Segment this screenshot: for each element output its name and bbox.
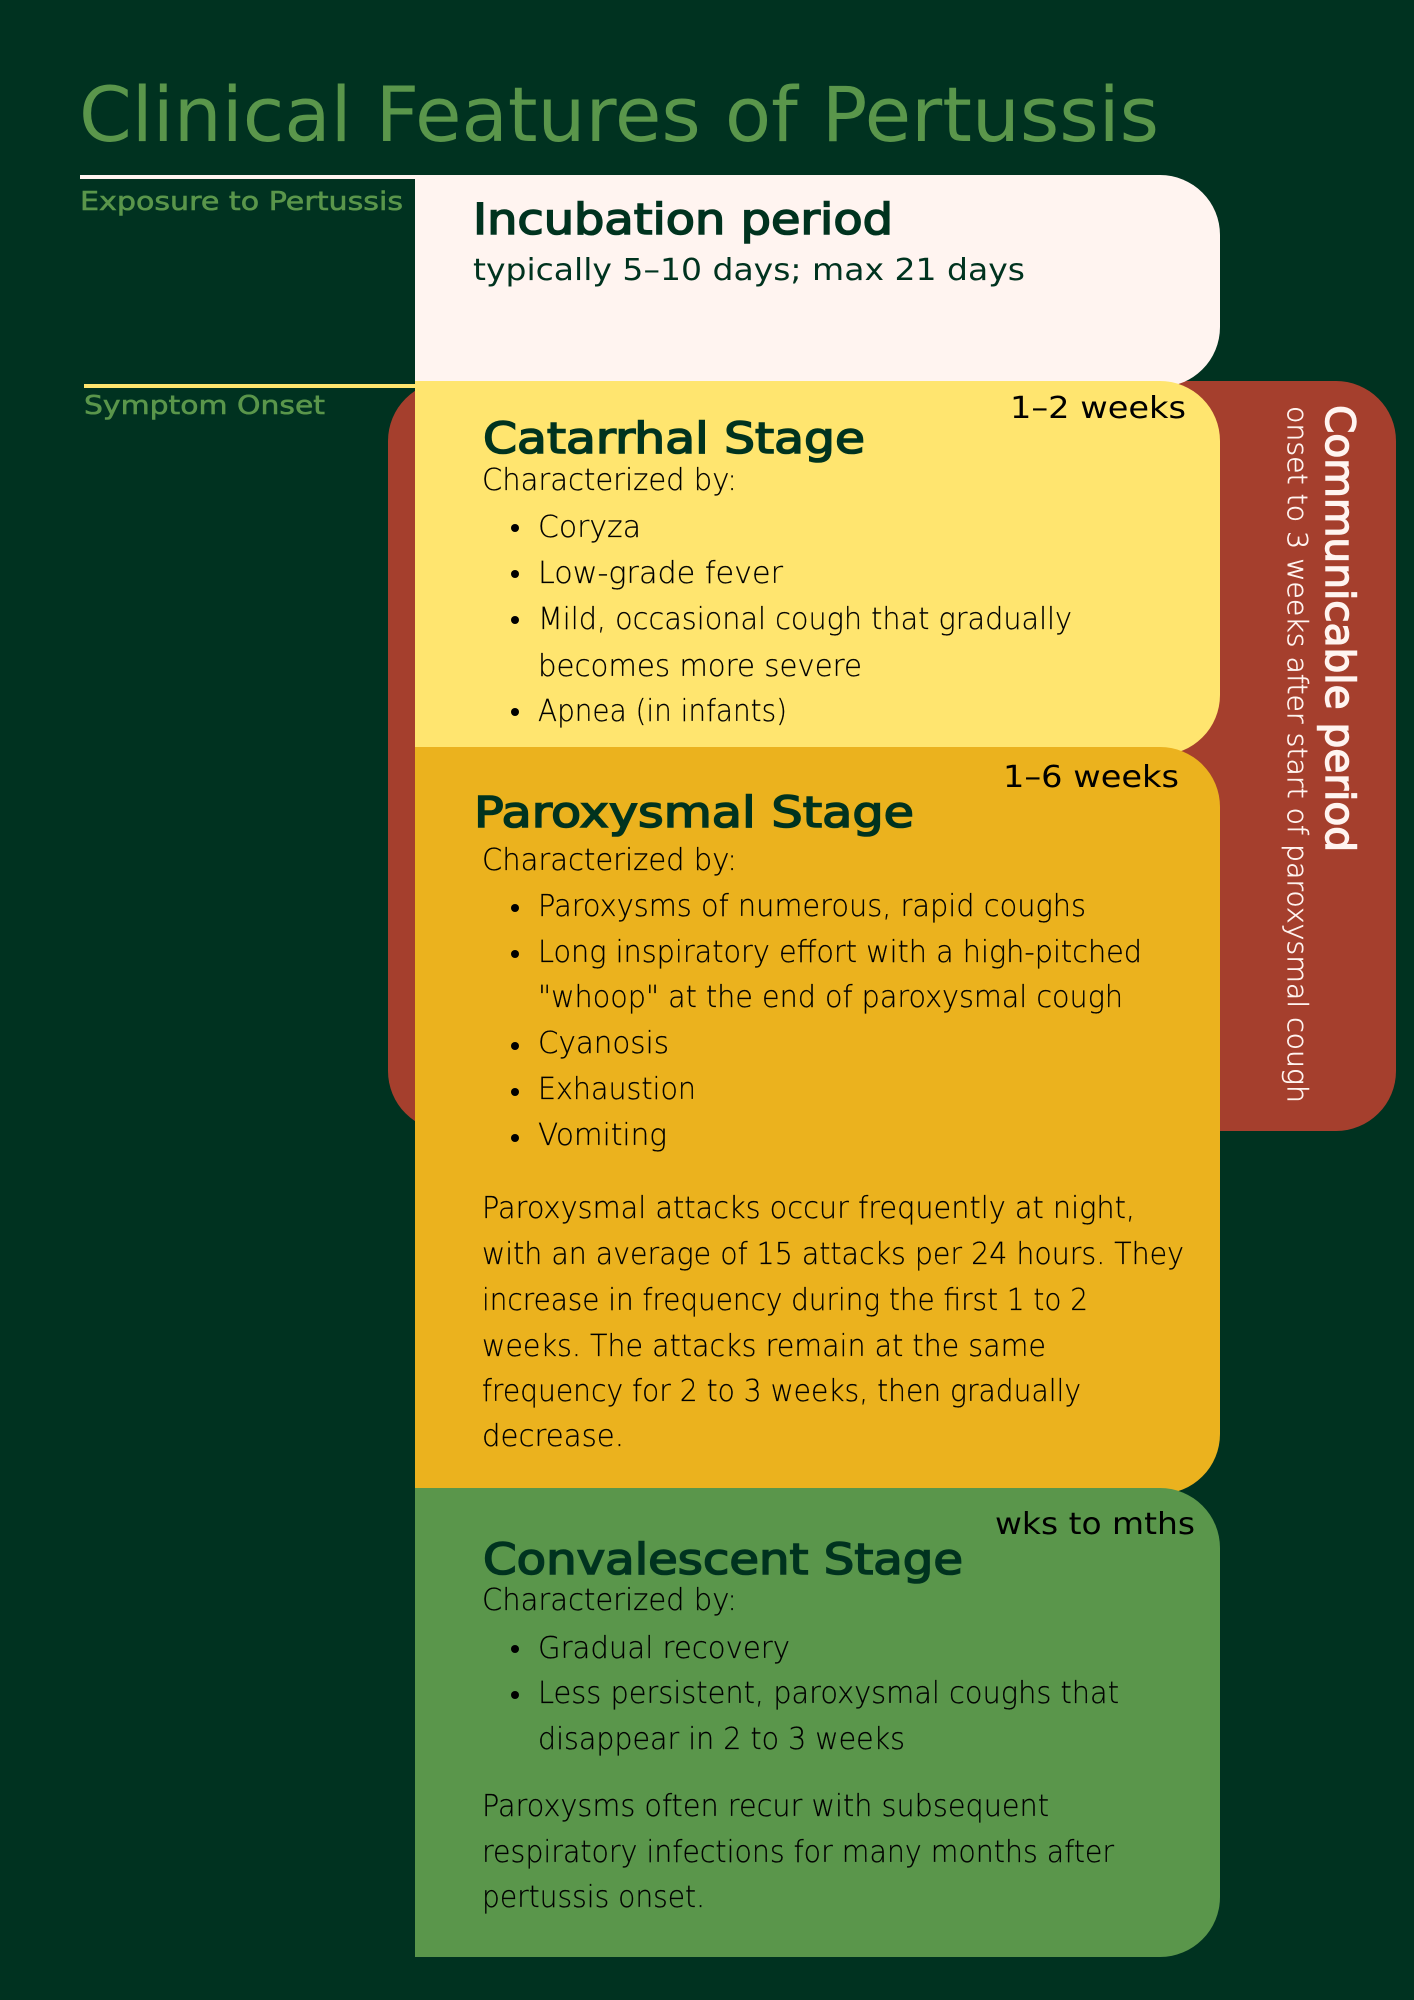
paroxysmal paragraph: with an average of 15 attacks per 24 hours. They bbox=[482, 1237, 1184, 1272]
convalescent paragraph: Paroxysms often recur with subsequent bbox=[482, 1789, 1049, 1824]
convalescent symptom list: Less persistent, paroxysmal coughs that bbox=[538, 1676, 1119, 1711]
paroxysmal duration: 1–6 weeks bbox=[1003, 760, 1179, 795]
catarrhal heading: Catarrhal Stage bbox=[483, 414, 865, 464]
paroxysmal paragraph: decrease. bbox=[482, 1419, 624, 1454]
convalescent symptom list: Gradual recovery bbox=[538, 1631, 790, 1666]
paroxysmal symptom list: Long inspiratory effort with a high-pitched bbox=[538, 935, 1142, 970]
communicable period text: onset to 3 weeks after start of paroxysmal cough bbox=[1281, 406, 1314, 1103]
incubation heading: Incubation period bbox=[473, 195, 893, 245]
catarrhal symptom list bbox=[511, 510, 1072, 729]
paroxysmal symptom list bbox=[511, 889, 1142, 1153]
paroxysmal paragraph bbox=[482, 1191, 1184, 1454]
paroxysmal symptom list: Cyanosis bbox=[538, 1026, 669, 1061]
convalescent intro: Characterized by: bbox=[482, 1583, 737, 1618]
panel: communicable period bbox=[388, 381, 1396, 1131]
marker: symptom onset bbox=[84, 384, 415, 421]
convalescent symptom list: disappear in 2 to 3 weeks bbox=[538, 1722, 905, 1757]
paroxysmal symptom list: "whoop" at the end of paroxysmal cough bbox=[538, 980, 1123, 1015]
paroxysmal heading: Paroxysmal Stage bbox=[474, 788, 914, 838]
marker: exposure to pertussis: Exposure to Pertussis bbox=[80, 187, 403, 217]
catarrhal symptom list: becomes more severe bbox=[538, 649, 862, 684]
convalescent paragraph: pertussis onset. bbox=[482, 1880, 705, 1915]
marker: symptom onset: Symptom Onset bbox=[84, 391, 325, 421]
catarrhal symptom list: Coryza bbox=[538, 510, 641, 545]
panel: catarrhal stage bbox=[415, 381, 1220, 755]
convalescent duration: wks to mths bbox=[995, 1507, 1195, 1542]
convalescent heading: Convalescent Stage bbox=[483, 1535, 963, 1585]
paroxysmal paragraph: increase in frequency during the first 1 to 2 bbox=[482, 1283, 1088, 1318]
marker: exposure to pertussis bbox=[80, 175, 415, 217]
convalescent paragraph: respiratory infections for many months after bbox=[482, 1835, 1115, 1870]
convalescent symptom list bbox=[511, 1631, 1119, 1757]
paroxysmal symptom list: Vomiting bbox=[538, 1118, 667, 1153]
title: Clinical Features of Pertussis bbox=[79, 70, 1159, 159]
panel: convalescent stage bbox=[415, 1488, 1220, 1957]
catarrhal intro: Characterized by: bbox=[482, 463, 737, 498]
incubation duration: typically 5–10 days; max 21 days bbox=[473, 253, 1025, 288]
paroxysmal intro: Characterized by: bbox=[482, 843, 737, 878]
catarrhal duration: 1–2 weeks bbox=[1010, 391, 1186, 426]
paroxysmal paragraph: frequency for 2 to 3 weeks, then gradually bbox=[482, 1374, 1081, 1409]
paroxysmal paragraph: Paroxysmal attacks occur frequently at night, bbox=[482, 1191, 1135, 1226]
communicable period heading: Communicable period bbox=[1316, 405, 1362, 852]
panel: incubation period bbox=[415, 175, 1220, 387]
convalescent paragraph bbox=[482, 1789, 1115, 1915]
catarrhal symptom list: Apnea (in infants) bbox=[538, 694, 787, 729]
paroxysmal symptom list: Exhaustion bbox=[538, 1072, 696, 1107]
paroxysmal symptom list: Paroxysms of numerous, rapid coughs bbox=[538, 889, 1086, 924]
catarrhal symptom list: Mild, occasional cough that gradually bbox=[538, 602, 1072, 637]
paroxysmal paragraph: weeks. The attacks remain at the same bbox=[482, 1329, 1046, 1364]
panel: paroxysmal stage bbox=[415, 747, 1220, 1494]
catarrhal symptom list: Low-grade fever bbox=[538, 556, 784, 591]
